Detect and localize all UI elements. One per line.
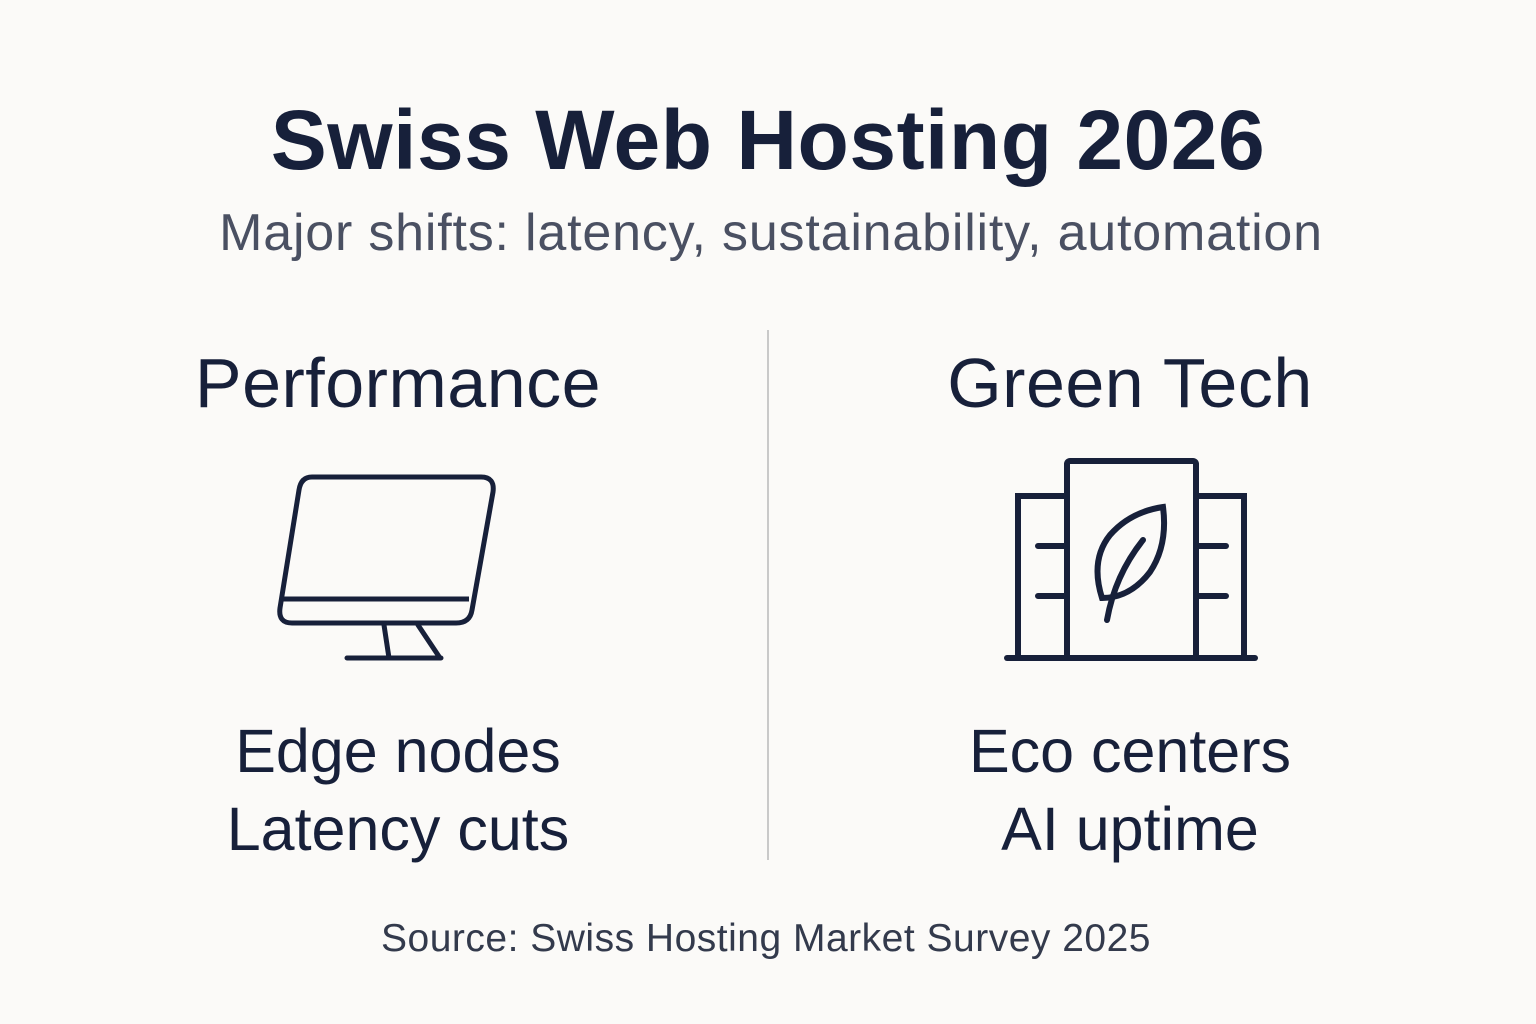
title: Swiss Web Hosting 2026 bbox=[271, 93, 1265, 187]
text: green tech items: Eco centers bbox=[969, 717, 1291, 785]
divider bbox=[767, 330, 769, 860]
panel: green tech bbox=[947, 344, 1313, 863]
panel: performance bbox=[195, 344, 601, 863]
heading: green tech: Green Tech bbox=[947, 344, 1313, 422]
icon: green building bbox=[1004, 458, 1258, 661]
text: green tech items bbox=[969, 717, 1291, 863]
subtitle: Major shifts: latency, sustainability, automation bbox=[219, 204, 1323, 262]
text: performance items: Latency cuts bbox=[227, 795, 569, 863]
icon: monitor bbox=[277, 474, 496, 660]
heading: performance: Performance bbox=[195, 344, 601, 422]
text: performance items bbox=[227, 717, 569, 863]
text: green tech items: AI uptime bbox=[1001, 795, 1259, 863]
source note: Source: Swiss Hosting Market Survey 2025 bbox=[381, 917, 1151, 960]
text: performance items: Edge nodes bbox=[235, 717, 561, 785]
